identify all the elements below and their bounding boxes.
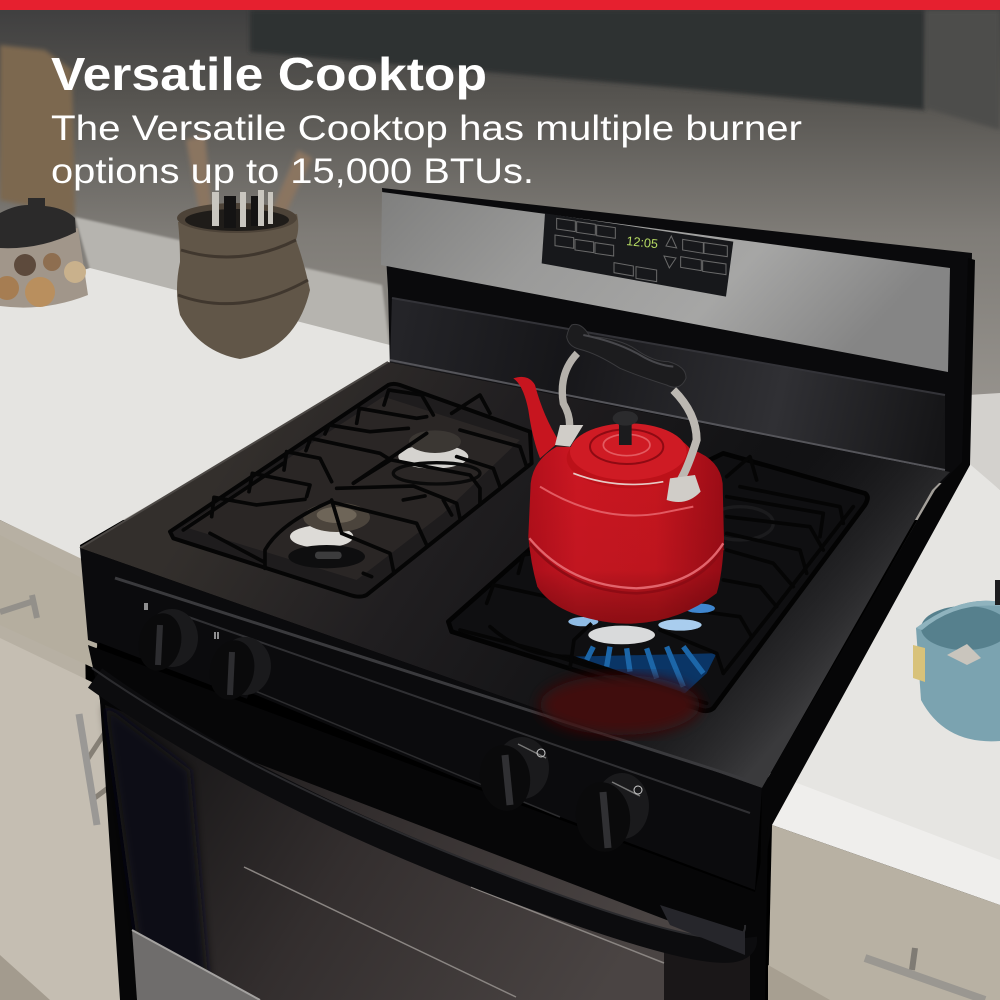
description [51,109,802,191]
lid knob [619,420,632,445]
left back burner [398,445,468,469]
spout [513,377,559,458]
stove back panel [381,188,972,485]
lid [567,428,693,488]
hinge brackets [667,475,701,502]
top accent bar [0,0,1000,10]
stove front [80,258,975,1000]
right knobs [476,737,649,855]
digital display: 12:05 [626,234,659,251]
left front burner [290,525,353,548]
heading: Versatile Cooktop [51,48,487,100]
description: The Versatile Cooktop has multiple burner [51,109,802,148]
oven racks [244,867,664,997]
kitchen wall [0,0,1000,520]
drawer handle [0,595,37,618]
digital display [542,213,733,297]
right countertop [762,460,1000,905]
door handle [87,728,112,800]
backsplash left [75,217,390,350]
utensil pot [177,135,312,359]
right cabinet [768,825,1000,1000]
side of stove [760,258,975,890]
blue mug [913,580,1000,741]
description: options up to 15,000 BTUs. [51,152,534,191]
oven door window [105,705,745,1000]
left countertop [0,268,390,560]
right wall backsplash [965,393,1000,490]
left burner tray and grate [170,384,532,597]
red kettle [513,324,724,624]
backguard glossy panel [390,298,945,470]
kettle reflection [540,675,700,735]
handle grip [567,324,686,387]
handle arms [562,353,577,442]
right back burner [707,507,773,540]
body [528,447,724,624]
silver burner cap and flames [588,626,655,644]
kick plate [132,930,260,1000]
blue flame fan [573,653,717,693]
left cabinets [0,520,138,1000]
cooktop surface [80,362,950,788]
right burner tray and grate [448,453,867,711]
left knobs [133,603,271,704]
cookie jar [0,198,88,308]
oven door handle [92,668,745,955]
control panel steel [381,192,950,372]
